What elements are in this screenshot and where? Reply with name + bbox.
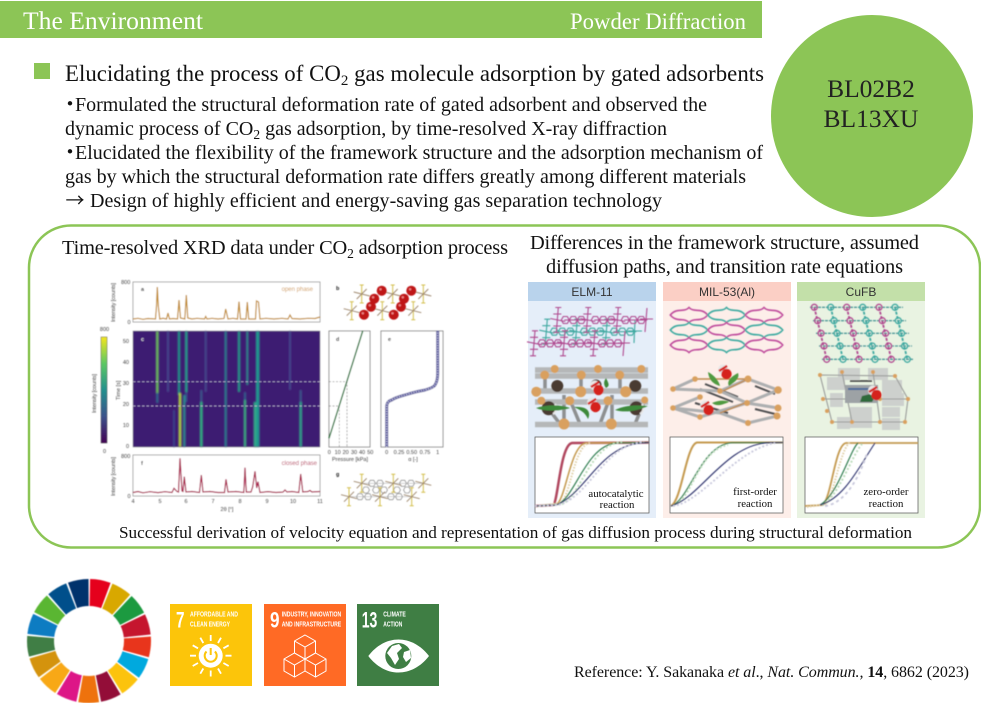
description text block: → bbox=[66, 186, 85, 213]
chart c: time-resolved heatmap: 30 bbox=[123, 381, 129, 387]
chart e: transition ratio vs time: 0.25 bbox=[394, 450, 404, 456]
left figure heading: adsorption process bbox=[354, 237, 508, 259]
chart e: transition ratio vs time: 1 bbox=[436, 450, 439, 456]
chart c: time-resolved heatmap: 40 bbox=[123, 360, 129, 366]
SDG 7 tile: 7 bbox=[176, 608, 184, 632]
panel caption: Successful derivation of velocity equation and representation of gas diffusion process during structural deformation bbox=[119, 523, 912, 542]
MIL-53 gas diffusion path model bbox=[670, 364, 782, 426]
chart d: pressure vs time: 30 bbox=[351, 450, 357, 456]
rounded results panel bbox=[29, 226, 980, 548]
colour bar: Intensity [counts] bbox=[92, 374, 98, 413]
chart e: transition ratio vs time: 0.75 bbox=[420, 450, 430, 456]
chart e: transition ratio vs time: 0 bbox=[385, 450, 388, 456]
chart a: open phase diffraction pattern: 800 bbox=[121, 280, 130, 286]
chart f: closed phase diffraction pattern: Intensity [counts] bbox=[111, 457, 117, 496]
chart e: transition ratio vs time: 0.50 bbox=[406, 450, 417, 456]
panel: ELM-11: ELM-11 bbox=[571, 285, 613, 299]
reaction label: zero-order: reaction bbox=[869, 498, 904, 510]
description text block: Elucidated the flexibility of the framework structure and the adsorption mechanism of bbox=[75, 142, 763, 164]
SDG 9 tile: 9 bbox=[270, 608, 280, 632]
chart f: closed phase diffraction pattern: 4 bbox=[131, 499, 135, 505]
reaction label: first-order: first-order bbox=[733, 486, 777, 498]
chart a: open phase diffraction pattern: a bbox=[141, 287, 145, 293]
icon: eye with globe bbox=[368, 640, 429, 672]
chart e: transition ratio vs time: e bbox=[388, 337, 391, 343]
beamline circle badge: BL13XU bbox=[824, 104, 918, 133]
chart a: open phase diffraction pattern bbox=[111, 280, 320, 326]
chart c: time-resolved heatmap: 50 bbox=[123, 339, 129, 345]
main heading: gas molecule adsorption by gated adsorbents bbox=[348, 61, 764, 86]
XRD figure bbox=[92, 280, 443, 513]
colour bar bbox=[92, 327, 109, 455]
structure b: open phase with CO2 bbox=[336, 285, 431, 320]
chart f: closed phase diffraction pattern: 8 bbox=[238, 499, 242, 505]
chart d: pressure vs time bbox=[328, 331, 373, 463]
chart c: time-resolved heatmap bbox=[116, 331, 320, 450]
chart f: closed phase diffraction pattern: 11 bbox=[317, 499, 323, 505]
reaction label: autocatalytic: autocatalytic bbox=[588, 488, 644, 500]
right figure heading: diffusion paths, and transition rate equations bbox=[546, 256, 903, 278]
header bar bbox=[0, 1, 762, 38]
description text block: gas by which the structural deformation rate differs greatly among different materials bbox=[65, 166, 746, 188]
right figure heading: Differences in the framework structure, assumed bbox=[530, 232, 919, 254]
description text block: Formulated the structural deformation rate of gated adsorbent and observed the bbox=[75, 94, 707, 116]
left figure heading: Time-resolved XRD data under CO bbox=[62, 237, 347, 259]
chart a: open phase diffraction pattern: Intensity [counts] bbox=[111, 283, 117, 322]
panel: ELM-11 bbox=[527, 282, 656, 518]
chart d: pressure vs time: 40 bbox=[359, 450, 365, 456]
SDG 7 tile: AFFORDABLE AND bbox=[190, 612, 238, 619]
chart f: closed phase diffraction pattern: 9 bbox=[265, 499, 269, 505]
chart f: closed phase diffraction pattern: closed phase bbox=[282, 461, 318, 467]
chart f: closed phase diffraction pattern: 6 bbox=[184, 499, 188, 505]
chart e: transition ratio vs time bbox=[381, 331, 443, 463]
description text block: Design of highly efficient and energy-saving gas separation technology bbox=[90, 190, 662, 212]
structure g: closed phase: g bbox=[336, 472, 339, 478]
chart d: pressure vs time: Pressure [kPa] bbox=[332, 457, 369, 463]
reference citation: Reference: Y. Sakanaka et al., Nat. Commun., 14, 6862 (2023) bbox=[574, 664, 969, 681]
chart f: closed phase diffraction pattern: 0 bbox=[127, 494, 131, 500]
left figure heading: 2 bbox=[347, 246, 354, 261]
chart a: open phase diffraction pattern: open phase bbox=[282, 287, 314, 293]
chart f: closed phase diffraction pattern: f bbox=[141, 461, 143, 467]
chart f: closed phase diffraction pattern: 2θ [°] bbox=[221, 507, 234, 513]
chart f: closed phase diffraction pattern: 10 bbox=[290, 499, 296, 505]
MIL-53 transition curves bbox=[670, 437, 783, 513]
main heading: Elucidating the process of CO bbox=[65, 61, 341, 86]
ELM-11 gas diffusion path model bbox=[531, 365, 648, 430]
SDG 9 tile: INDUSTRY, INNOVATION bbox=[282, 612, 341, 619]
CuFB gas diffusion path model bbox=[818, 368, 910, 430]
chart c: time-resolved heatmap: 20 bbox=[123, 402, 129, 408]
description text block: ・ bbox=[60, 94, 80, 116]
reaction label: autocatalytic: reaction bbox=[600, 499, 635, 511]
description text block: 2 bbox=[253, 127, 260, 142]
SDG 9 tile: AND INFRASTRUCTURE bbox=[282, 622, 341, 629]
SDG 7 tile bbox=[170, 604, 252, 686]
MIL-53 framework structure bbox=[670, 308, 783, 352]
CuFB transition curves bbox=[805, 437, 918, 513]
panel: CuFB: CuFB bbox=[846, 285, 876, 299]
beamline circle badge bbox=[771, 15, 973, 217]
description text block: gas adsorption, by time-resolved X-ray diffraction bbox=[260, 118, 667, 140]
icon: sun with power symbol bbox=[190, 635, 232, 676]
title: The Environment: The Environment bbox=[23, 6, 203, 35]
chart d: pressure vs time: 20 bbox=[343, 450, 349, 456]
chart f: closed phase diffraction pattern: 5 bbox=[158, 499, 162, 505]
ELM-11 transition curves bbox=[535, 437, 649, 513]
chart d: pressure vs time: d bbox=[336, 337, 339, 343]
colour bar: 0 bbox=[103, 449, 106, 455]
chart e: transition ratio vs time: α [-] bbox=[408, 457, 418, 463]
reaction label: first-order: reaction bbox=[738, 498, 773, 510]
chart f: closed phase diffraction pattern: 800 bbox=[121, 454, 130, 460]
reaction label: zero-order: zero-order bbox=[864, 486, 908, 498]
SDG colour wheel bbox=[20, 572, 158, 703]
CuFB framework structure bbox=[810, 304, 914, 362]
main heading: 2 bbox=[341, 73, 348, 89]
chart a: open phase diffraction pattern: 0 bbox=[127, 320, 131, 326]
description text block bbox=[60, 94, 763, 213]
structure b: open phase with CO2: b bbox=[336, 286, 340, 292]
SDG 13 tile bbox=[357, 604, 439, 686]
SDG 7 tile: CLEAN ENERGY bbox=[190, 622, 230, 629]
panel: MIL-53(Al): MIL-53(Al) bbox=[699, 285, 755, 299]
SDG 13 tile: 13 bbox=[362, 608, 377, 632]
chart d: pressure vs time: 10 bbox=[335, 450, 341, 456]
icon: stacked cubes bbox=[284, 635, 326, 677]
description text block: ・ bbox=[60, 142, 80, 164]
ELM-11 framework structure bbox=[527, 308, 653, 356]
SDG 13 tile: CLIMATE bbox=[383, 612, 406, 619]
panel: MIL-53(Al) bbox=[663, 282, 791, 518]
heading bullet bbox=[34, 63, 50, 79]
panel: CuFB bbox=[797, 282, 925, 518]
SDG 13 tile: ACTION bbox=[383, 622, 402, 629]
chart d: pressure vs time: 50 bbox=[367, 450, 373, 456]
right figure heading bbox=[530, 232, 919, 278]
chart c: time-resolved heatmap: 0 bbox=[126, 444, 129, 450]
colour bar: 800 bbox=[100, 327, 109, 333]
chart c: time-resolved heatmap: Time [s] bbox=[116, 380, 122, 400]
beamline circle badge: BL02B2 bbox=[827, 74, 915, 103]
chart d: pressure vs time: 0 bbox=[328, 450, 331, 456]
chart c: time-resolved heatmap: 10 bbox=[123, 423, 129, 429]
SDG 9 tile bbox=[264, 604, 346, 686]
chart c: time-resolved heatmap: c bbox=[141, 337, 144, 343]
chart f: closed phase diffraction pattern: 7 bbox=[211, 499, 215, 505]
structure g: closed phase bbox=[336, 472, 431, 506]
description text block: dynamic process of CO bbox=[65, 118, 253, 140]
chart f: closed phase diffraction pattern bbox=[111, 454, 323, 513]
category: Powder Diffraction: Powder Diffraction bbox=[570, 9, 746, 34]
